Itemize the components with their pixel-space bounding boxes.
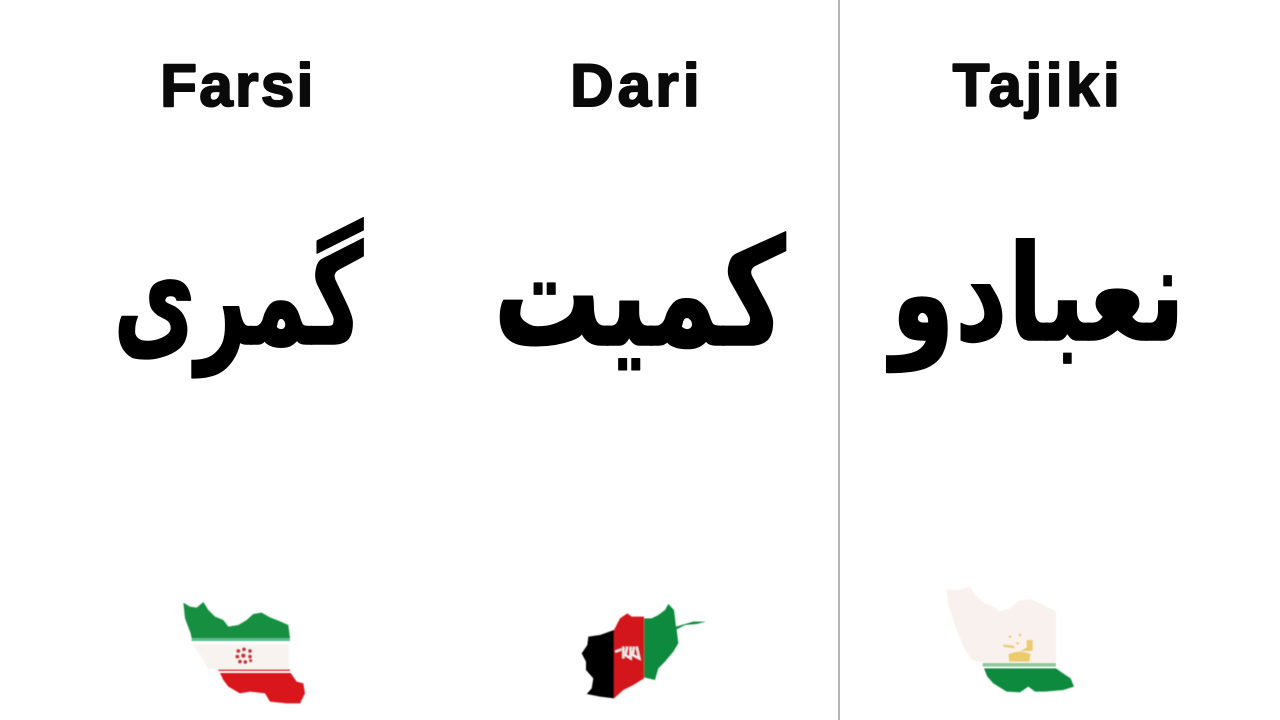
- word: Farsi: گمری: [113, 216, 363, 378]
- icon: Tajikistan map flag: [947, 587, 1074, 692]
- icon: Iran map flag: [183, 602, 305, 703]
- word: Tajiki: نعبادو: [886, 217, 1185, 372]
- icon: Afghanistan map flag: [582, 604, 706, 698]
- heading: Farsi: Farsi: [160, 52, 316, 119]
- heading: Dari: Dari: [570, 52, 704, 119]
- heading: Tajiki: Tajiki: [953, 52, 1123, 119]
- word: Dari: کمیت: [493, 206, 786, 381]
